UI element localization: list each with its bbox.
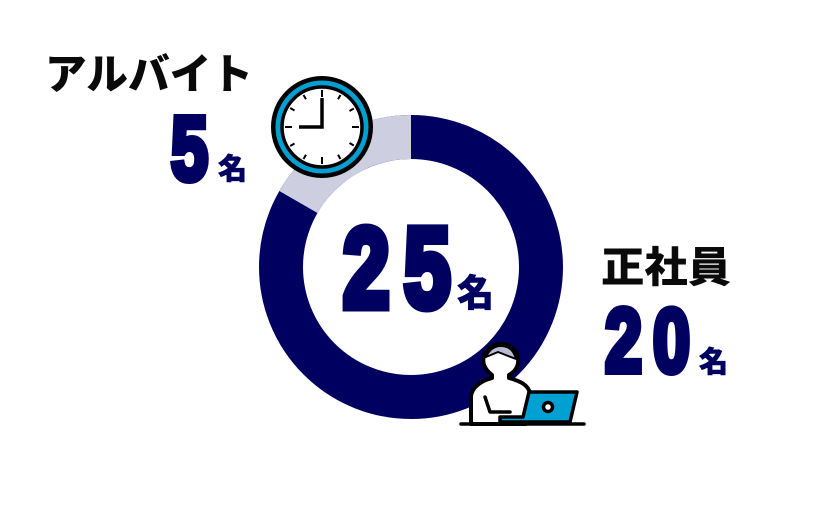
- label: 正社員 20名: [601, 244, 731, 391]
- total value: 25名: 5: [404, 206, 451, 332]
- label: アルバイト 5名: 5: [171, 98, 208, 199]
- label: 正社員 20名: 0: [653, 290, 690, 391]
- icon: person at laptop: [461, 344, 584, 424]
- total value: 25名: 名: [457, 273, 494, 314]
- label: アルバイト 5名: アルバイト: [45, 51, 253, 98]
- label: 正社員 20名: 正社員: [601, 244, 731, 291]
- label: アルバイト 5名: [45, 51, 253, 199]
- donut chart: [281, 137, 541, 397]
- icon: clock: [271, 76, 373, 178]
- label: 正社員 20名: 2: [605, 290, 642, 391]
- total value: 25名: [343, 206, 494, 332]
- label: アルバイト 5名: 名: [218, 153, 247, 186]
- total value: 25名: 2: [343, 206, 390, 332]
- label: 正社員 20名: 名: [699, 346, 728, 379]
